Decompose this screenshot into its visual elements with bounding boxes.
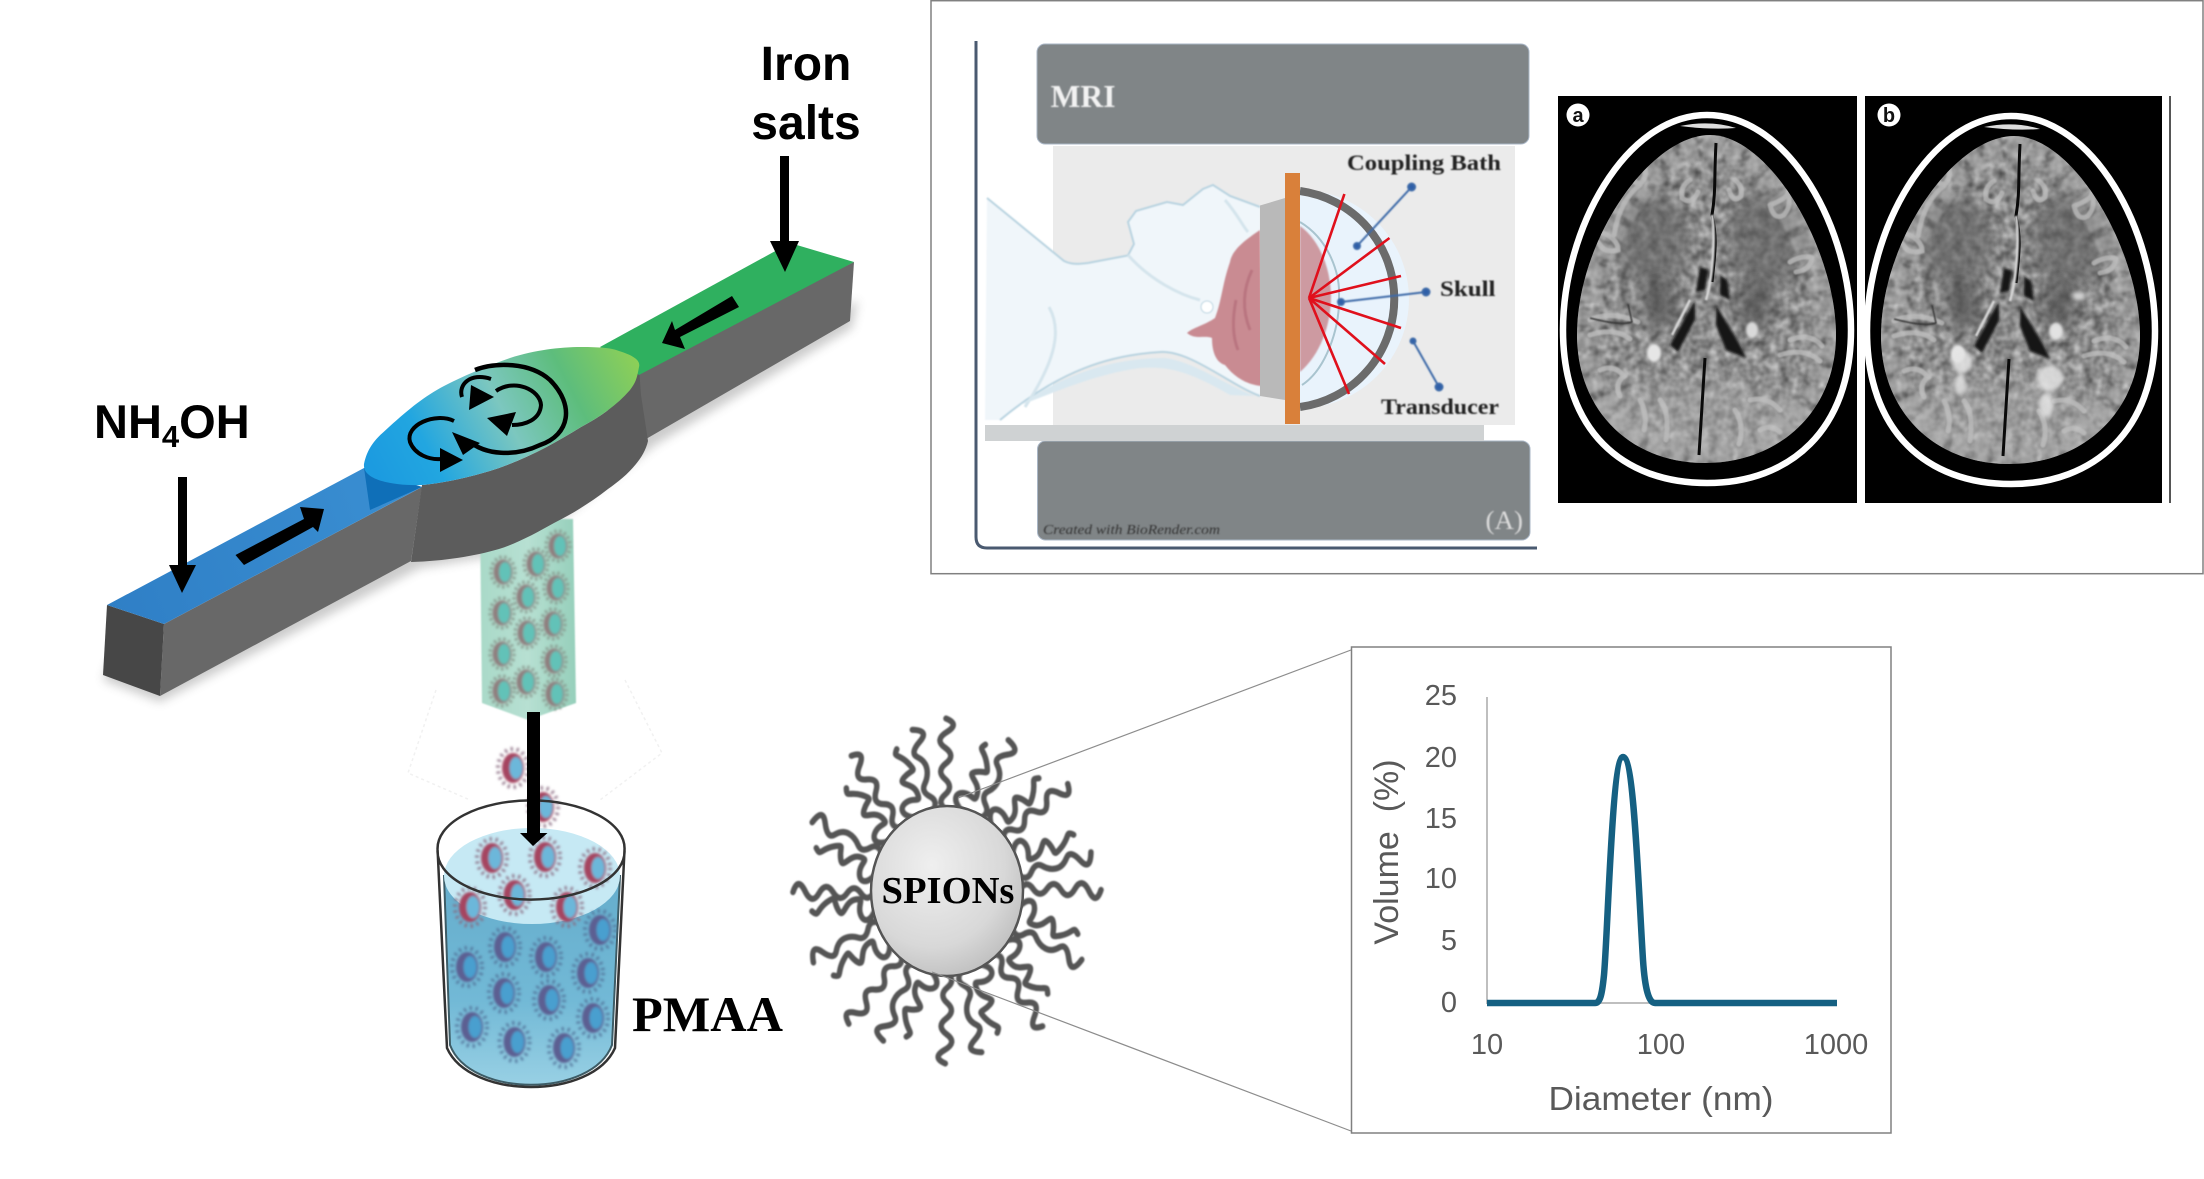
schematic labels: Transducer [1381, 394, 1499, 419]
falling particles [498, 749, 558, 826]
schematic labels: MRI [1051, 79, 1116, 114]
focused ultrasound beams [1309, 194, 1401, 394]
x tick labels: 1000 [1804, 1029, 1868, 1061]
scan label b [1878, 104, 1900, 127]
label: NH4OH: OH [179, 395, 250, 448]
arrow: flow in blue channel [236, 507, 324, 565]
scan label a: a [1572, 105, 1584, 127]
label: NH4OH: 4 [162, 419, 180, 454]
y tick labels: 5 [1441, 925, 1457, 957]
y tick labels: 10 [1425, 863, 1457, 895]
SPION particle with polymer brush [793, 719, 1101, 1064]
label: iron salts: Iron [761, 38, 851, 91]
scan label b: b [1883, 105, 1895, 127]
schematic labels: (A) [1486, 506, 1523, 535]
orange plate [1285, 173, 1300, 424]
panel: MRI-guided focused ultrasound [931, 1, 2203, 574]
particles near the surface [455, 838, 610, 926]
suspended particles [452, 911, 615, 1067]
y axis title: Volume (%) [1368, 759, 1406, 945]
transducer ring [1300, 191, 1394, 407]
schematic labels: Created with BioRender.com [1043, 522, 1220, 537]
label: iron salts [751, 38, 861, 150]
label: NH4OH: NH [94, 395, 162, 448]
arrow: NH4OH inlet [169, 477, 196, 593]
arrow: into beaker [520, 712, 548, 846]
arrow: flow in green channel [662, 296, 739, 349]
beaker with PMAA solution [438, 749, 625, 1087]
arrow: iron salts inlet [770, 156, 799, 272]
label: PMAA: PMAA [632, 986, 783, 1042]
pointer lines [1338, 184, 1442, 390]
y tick labels: 0 [1441, 987, 1457, 1019]
scan label a [1566, 104, 1590, 127]
y tick labels: 15 [1425, 803, 1457, 835]
y tick labels [1425, 680, 1457, 1019]
MRI scan a [1558, 96, 1857, 503]
lesion highlights [1952, 292, 2084, 417]
reactor channel body [103, 243, 854, 696]
label: iron salts: salts [751, 97, 861, 150]
schematic labels [1043, 79, 1523, 537]
microfluidic reactor [103, 156, 854, 720]
water body [444, 876, 620, 1085]
polymer chains [793, 719, 1101, 1064]
x tick labels: 100 [1637, 1029, 1685, 1061]
schematic labels: Skull [1440, 276, 1496, 301]
MRI magnet top [1037, 44, 1529, 144]
MRI magnet bottom [1038, 441, 1530, 540]
panel: particle size distribution chart [1352, 647, 1891, 1133]
skull arc [1300, 222, 1339, 385]
patient body [985, 185, 1260, 420]
reactor soft shadow [103, 300, 858, 702]
head holder wedge [1260, 198, 1285, 400]
y tick labels: 25 [1425, 680, 1457, 712]
mixing swirl arrows [409, 365, 566, 472]
patient table [985, 425, 1484, 441]
brain behind bath [1300, 226, 1331, 372]
axes [1487, 697, 1837, 1003]
y tick labels: 20 [1425, 742, 1457, 774]
beaker glass [438, 800, 625, 1087]
zoom connector lines [932, 650, 1351, 1131]
MRI scan b [1865, 96, 2162, 503]
schematic labels: Coupling Bath [1347, 150, 1501, 175]
transducer bath [1300, 190, 1409, 408]
water surface [444, 828, 620, 924]
schematic frame [976, 41, 1537, 548]
core label: SPIONs [882, 870, 1014, 912]
particle stream column [480, 519, 576, 720]
x tick labels: 10 [1471, 1029, 1503, 1061]
x tick labels [1471, 1029, 1868, 1061]
faint projection outline [408, 680, 662, 800]
bore background [1053, 146, 1515, 425]
distribution curve [1487, 757, 1837, 1003]
right edge rule [2169, 96, 2171, 503]
x axis title: Diameter (nm) [1548, 1080, 1774, 1117]
core sphere [871, 806, 1023, 976]
brain [1187, 230, 1262, 386]
